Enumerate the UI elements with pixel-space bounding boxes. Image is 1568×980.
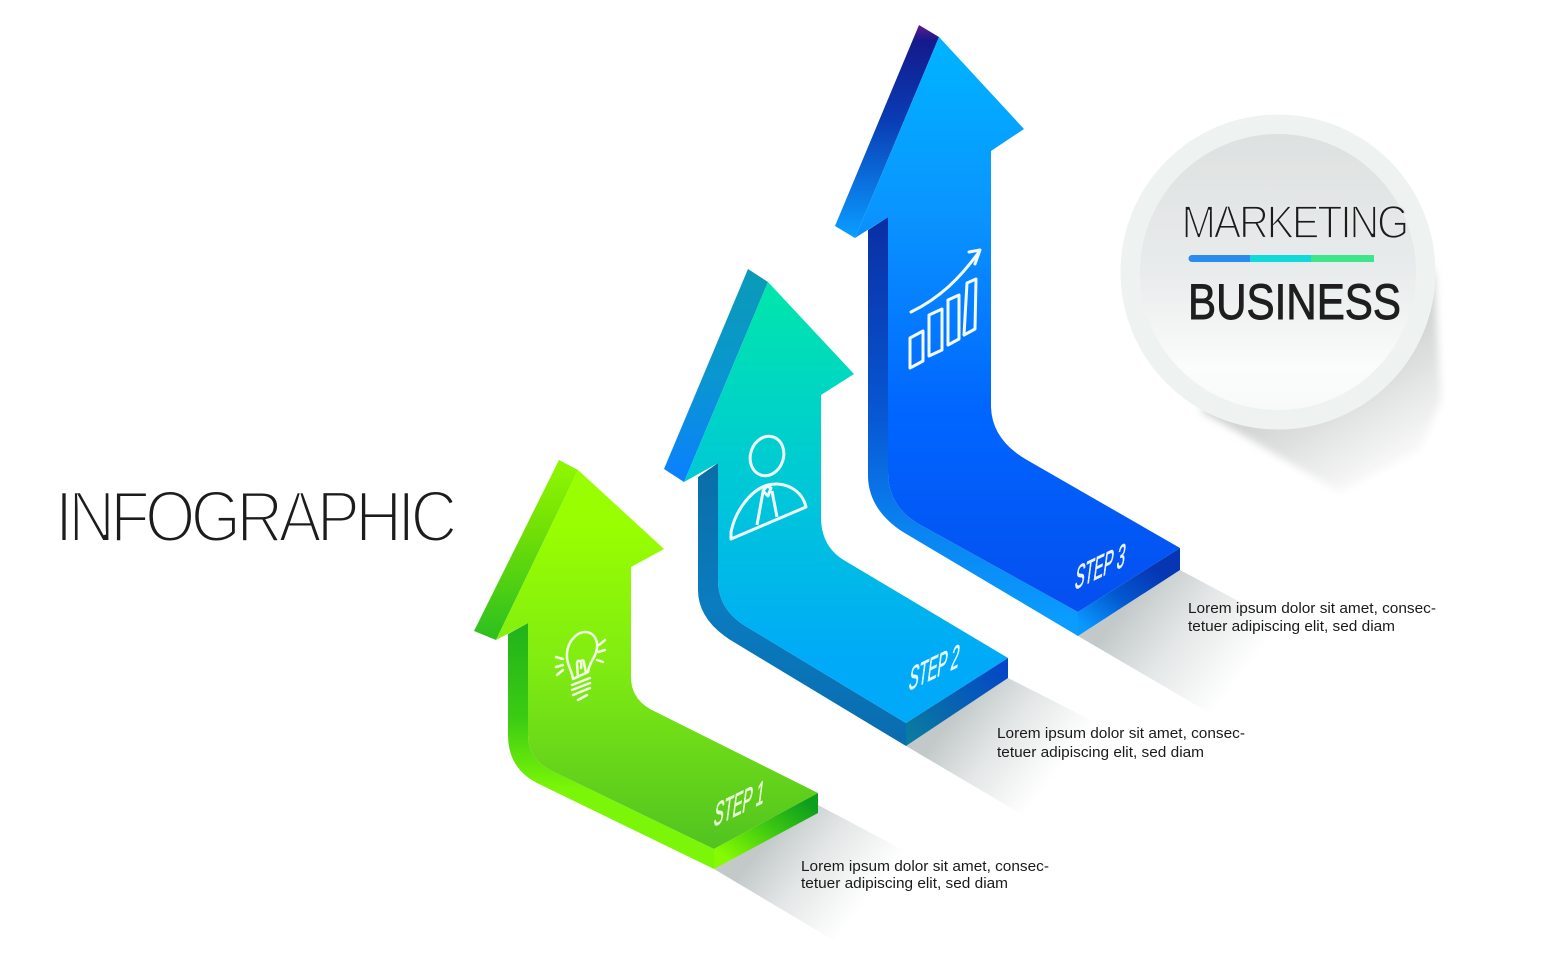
description: step 3: tetuer adipiscing elit, sed diam	[1188, 618, 1395, 635]
arrow 1 end face	[714, 793, 818, 869]
title: INFOGRAPHIC: INFOGRAPHIC	[55, 476, 457, 557]
badge heading: MARKETING: MARKETING	[1182, 197, 1409, 249]
arrow 2 wing side	[664, 269, 768, 482]
arrow shadows	[714, 570, 1330, 950]
description: step 1: Lorem ipsum dolor sit amet, consec-	[801, 858, 1049, 875]
badge outer ring	[1120, 114, 1436, 430]
arrow 1 top face	[496, 470, 818, 849]
arrow 1 side wall	[508, 623, 714, 869]
description: step 2: tetuer adipiscing elit, sed diam	[997, 744, 1204, 761]
arrow 3 wing side	[835, 25, 939, 238]
description: step 1	[801, 858, 1049, 892]
arrow 1 wing side	[474, 460, 578, 640]
arrow 3 top face	[855, 37, 1180, 612]
arrow: step 3 (blue)	[835, 25, 1180, 636]
arrow: step 1 (green): STEP 1	[712, 772, 767, 835]
description: step 3: Lorem ipsum dolor sit amet, consec-	[1188, 600, 1436, 617]
badge inner disc	[1140, 134, 1416, 410]
arrow 2 side wall	[698, 463, 906, 746]
arrow 3 side wall	[868, 217, 1078, 636]
icon: rising bar chart	[910, 250, 980, 368]
arrow 2 top face	[684, 282, 1008, 723]
icon: light bulb	[556, 632, 605, 700]
badge divider: tri-colour bar	[1188, 255, 1374, 262]
arrow: step 1 (green)	[474, 460, 818, 869]
arrow: step 2 (teal)	[664, 269, 1008, 746]
badge heading: BUSINESS: BUSINESS	[1188, 274, 1401, 330]
badge: marketing business	[1120, 114, 1441, 492]
badge long shadow	[1200, 270, 1441, 492]
description: step 3	[1188, 600, 1436, 635]
arrow 3 end face	[1078, 548, 1180, 636]
arrow 2 end face	[906, 658, 1008, 746]
description: step 2	[997, 725, 1245, 761]
arrow: step 2 (teal): STEP 2	[907, 636, 962, 699]
description: step 2: Lorem ipsum dolor sit amet, consec-	[997, 725, 1245, 742]
arrow: step 3 (blue): STEP 3	[1073, 535, 1128, 598]
icon: person with tie	[731, 432, 806, 539]
description: step 1: tetuer adipiscing elit, sed diam	[801, 875, 1008, 892]
